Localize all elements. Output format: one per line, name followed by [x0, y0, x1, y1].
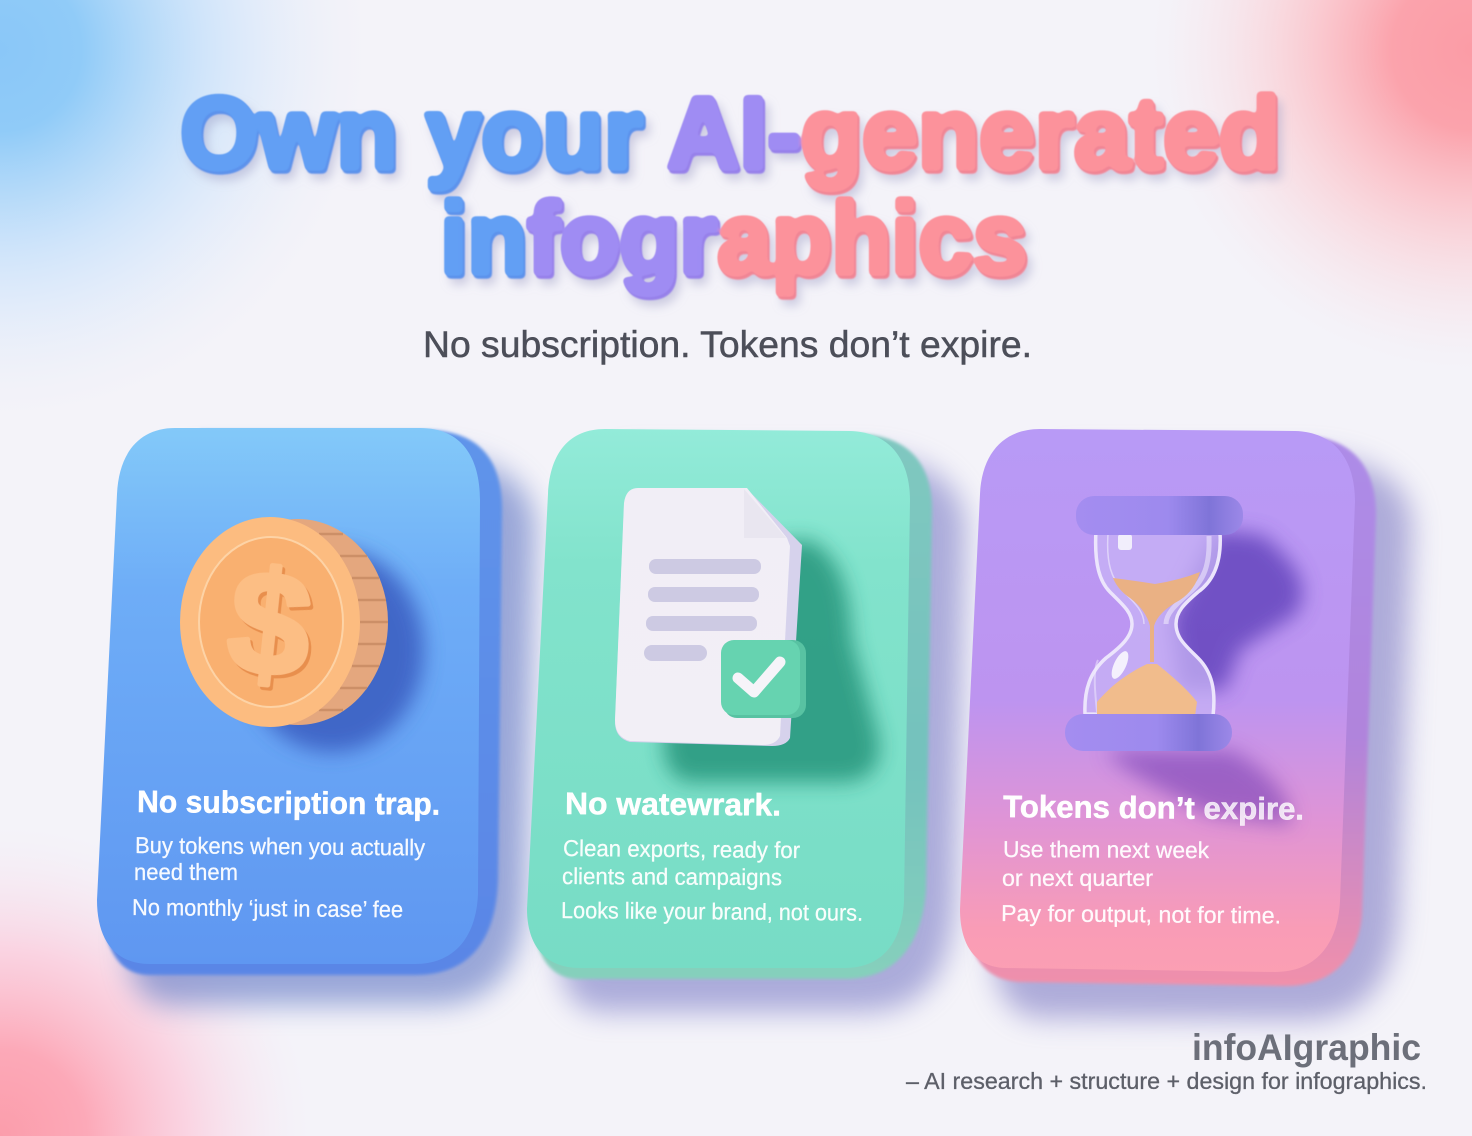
icon: document with check badge — [615, 488, 879, 782]
card heading: No subscription trap. — [137, 784, 440, 822]
card body text: Looks like your brand, not ours. — [561, 897, 863, 926]
card body text: Pay for output, not for time. — [1001, 900, 1281, 928]
card body text — [1001, 836, 1281, 928]
footer brand: – AI research + structure + design for infographics. — [906, 1068, 1427, 1094]
panel: no subscription trap — [97, 428, 535, 1005]
panel: tokens don't expire — [960, 429, 1412, 1020]
card heading: No watewrark. — [565, 786, 781, 823]
card body text: Buy tokens when you actually — [135, 832, 426, 861]
title: infographics — [440, 181, 1027, 295]
title — [180, 76, 1280, 295]
title: Own your AI-generated — [180, 76, 1280, 190]
card body text: No monthly ‘just in case’ fee — [132, 894, 403, 922]
card body text: or next quarter — [1002, 865, 1153, 891]
card body text: Clean exports, ready for — [563, 835, 801, 863]
panel: no watermark — [527, 429, 965, 1012]
icon: coin: $ — [221, 538, 319, 709]
card body text: clients and campaigns — [562, 863, 782, 890]
card body text — [561, 835, 863, 926]
subtitle: No subscription. Tokens don’t expire. — [423, 324, 1032, 365]
icon: coin — [180, 517, 424, 752]
card heading: Tokens don’t expire. — [1003, 789, 1304, 827]
icon: hourglass — [1065, 496, 1303, 825]
card body text: need them — [134, 859, 238, 885]
footer brand: infoAIgraphic — [1192, 1027, 1421, 1068]
footer brand — [906, 1027, 1427, 1094]
card body text: Use them next week — [1003, 836, 1210, 863]
card body text — [132, 832, 426, 922]
